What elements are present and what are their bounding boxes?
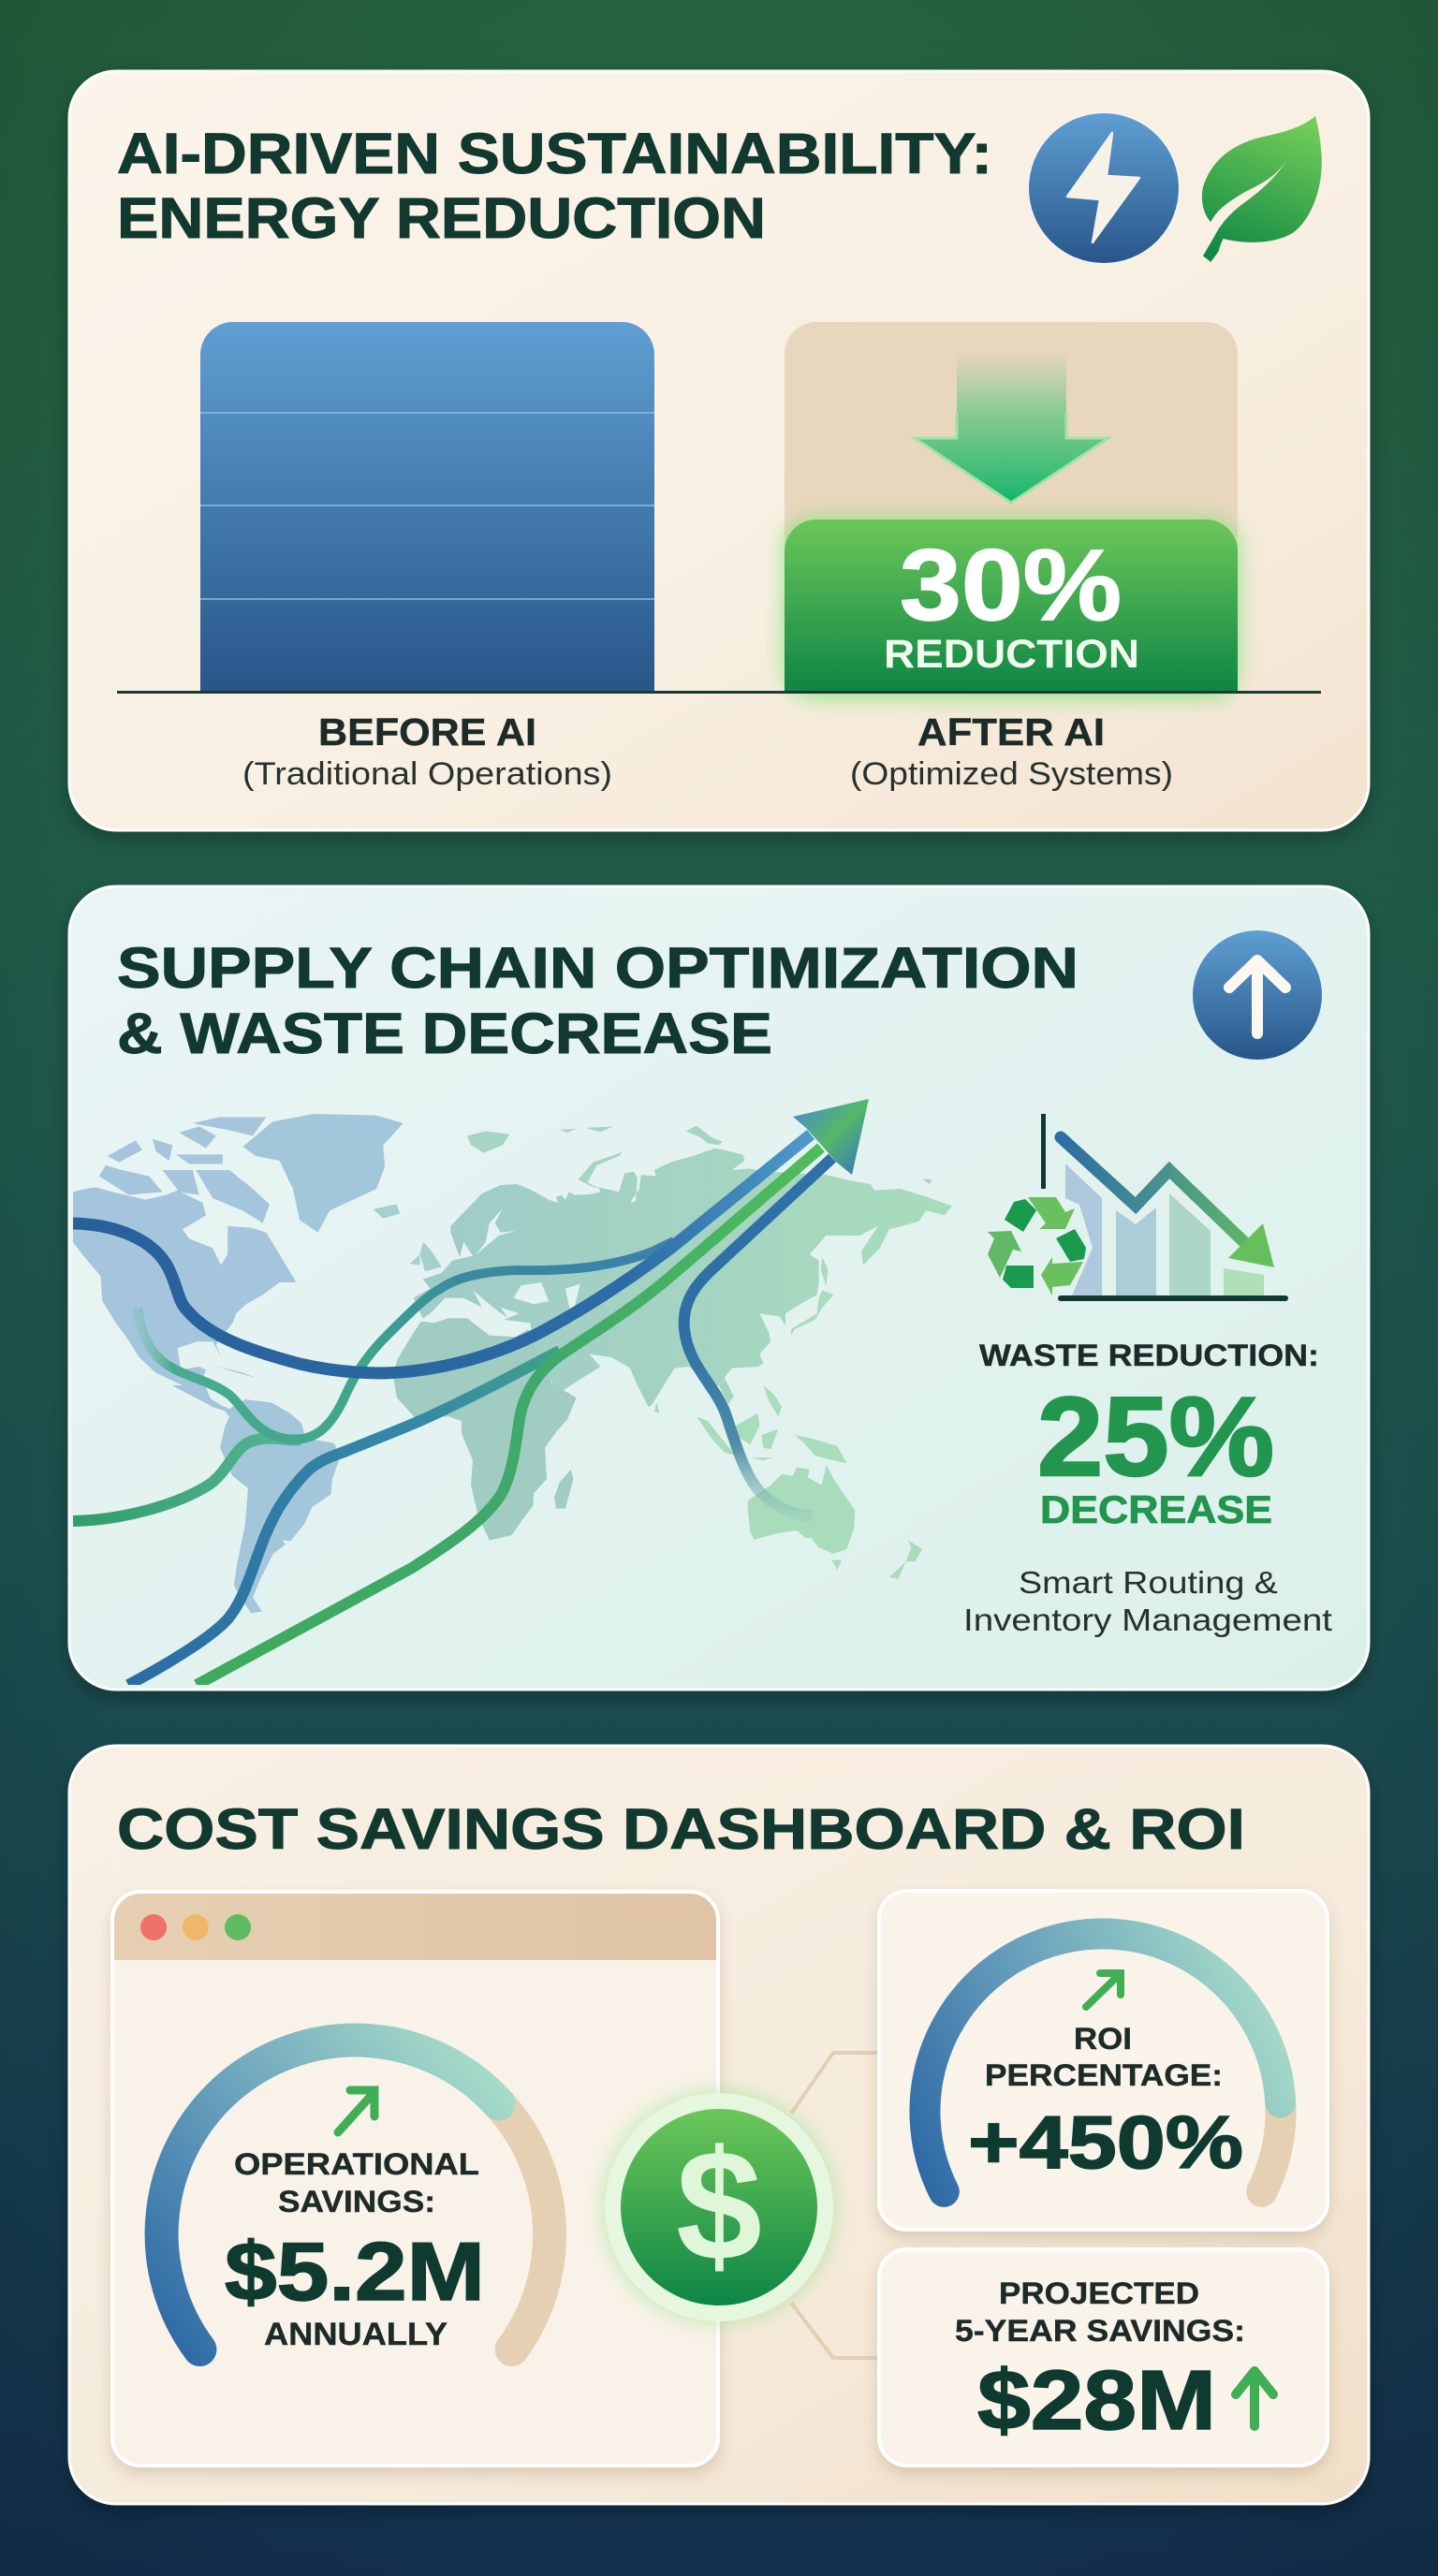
label: before AI bbox=[242, 710, 612, 792]
callout: waste reduction: WASTE REDUCTION: bbox=[979, 1339, 1319, 1372]
icon: waste trend chart bbox=[1043, 1114, 1285, 1298]
callout: waste reduction: DECREASE bbox=[1040, 1487, 1272, 1531]
stat: projected savings bbox=[955, 2276, 1245, 2448]
icon: dollar coin: $ bbox=[676, 2117, 762, 2293]
stat: ROI percentage: ROI bbox=[1074, 2022, 1132, 2056]
stat: operational savings: ANNUALLY bbox=[264, 2317, 448, 2352]
label: after AI: AFTER AI bbox=[917, 710, 1105, 754]
callout: waste reduction: Smart Routing & bbox=[1019, 1565, 1278, 1600]
stat: operational savings: SAVINGS: bbox=[278, 2185, 435, 2218]
heading: energy reduction: ENERGY REDUCTION bbox=[117, 186, 766, 250]
arrowhead bbox=[793, 1099, 869, 1175]
stat: operational savings bbox=[225, 2147, 485, 2352]
heading: energy reduction bbox=[117, 122, 992, 250]
stat: operational savings: OPERATIONAL bbox=[234, 2147, 479, 2181]
stat: projected savings: 5-YEAR SAVINGS: bbox=[955, 2314, 1245, 2348]
heading: supply chain bbox=[117, 936, 1078, 1065]
heading: cost savings: COST SAVINGS DASHBOARD & ROI bbox=[117, 1797, 1245, 1861]
arrow: down bbox=[915, 352, 1108, 503]
callout: waste reduction: 25% bbox=[1037, 1374, 1274, 1500]
label: before AI: BEFORE AI bbox=[318, 710, 536, 754]
icon: recycle bbox=[988, 1197, 1086, 1295]
panel: supply chain bbox=[69, 886, 1369, 1690]
stat: operational savings: $5.2M bbox=[225, 2225, 485, 2318]
stat: projected savings: $28M bbox=[977, 2354, 1216, 2448]
stat: projected savings: PROJECTED bbox=[999, 2276, 1199, 2310]
heading: supply chain: SUPPLY CHAIN OPTIMIZATION bbox=[117, 936, 1078, 1000]
map: South America bbox=[171, 1385, 340, 1613]
dashboard window bbox=[112, 1892, 718, 2466]
label: reduction: REDUCTION bbox=[884, 632, 1139, 677]
callout: waste reduction: Inventory Management bbox=[963, 1603, 1332, 1637]
icon: up arrow bbox=[1193, 930, 1322, 1060]
heading: supply chain: & WASTE DECREASE bbox=[117, 1002, 772, 1065]
card: ROI bbox=[879, 1891, 1328, 2230]
panel: energy reduction bbox=[69, 71, 1369, 830]
value: 30%: 30% bbox=[900, 528, 1122, 641]
world map with routes bbox=[73, 1099, 952, 1685]
callout: waste reduction bbox=[963, 1339, 1332, 1637]
icon: lightning bolt bbox=[1028, 112, 1180, 264]
bar: after AI bbox=[785, 322, 1238, 697]
icon: leaf bbox=[1202, 116, 1322, 262]
icon: green up arrow bbox=[1236, 2371, 1273, 2426]
map: Eurasia, Africa and Oceania bbox=[393, 1126, 952, 1579]
label: before AI: (Traditional Operations) bbox=[242, 756, 612, 792]
gauge: operational savings bbox=[162, 2041, 550, 2349]
label: after AI: (Optimized Systems) bbox=[850, 756, 1173, 792]
panel: cost savings bbox=[69, 1746, 1369, 2504]
gauge: ROI bbox=[925, 1934, 1281, 2191]
stat: ROI percentage bbox=[968, 2022, 1243, 2184]
routes bbox=[73, 1099, 869, 1685]
connectors bbox=[791, 2053, 885, 2358]
heading: energy reduction: AI-DRIVEN SUSTAINABILITY: bbox=[117, 122, 992, 185]
icon: dollar coin bbox=[605, 2093, 833, 2321]
map: North America and Arctic bbox=[73, 1114, 442, 1413]
card: 5-year savings bbox=[879, 2249, 1328, 2466]
label: after AI bbox=[850, 710, 1173, 792]
stat: ROI percentage: PERCENTAGE: bbox=[985, 2058, 1223, 2092]
stat: ROI percentage: +450% bbox=[968, 2100, 1243, 2184]
bar: before AI bbox=[200, 322, 654, 691]
